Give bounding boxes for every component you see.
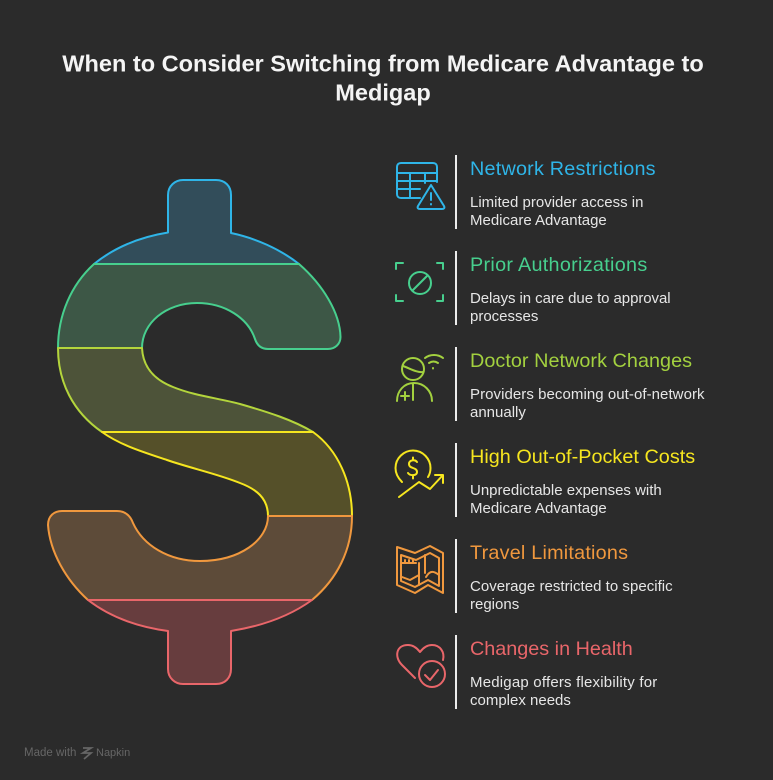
item: travel limitations: [397, 539, 673, 613]
heading: Travel Limitations: [470, 542, 628, 564]
dollar band: changes in health: [88, 600, 312, 684]
footer: made with Napkin: [24, 747, 130, 759]
icon: blocked symbol in focus frame: [396, 263, 443, 301]
dollar band: prior authorizations: [58, 264, 340, 349]
description: Delays in care due to approval: [470, 290, 671, 307]
description: Medicare Advantage: [470, 212, 607, 229]
divider: [455, 539, 457, 613]
divider: [455, 443, 457, 517]
description: Limited provider access in: [470, 194, 643, 211]
icon: table with warning triangle: [397, 163, 444, 209]
title: When to Consider Switching from Medicare Advantage to: [62, 50, 704, 76]
dollar sign chart: [48, 180, 352, 684]
item: changes in health: [397, 635, 657, 709]
divider: [455, 155, 457, 229]
dollar band: doctor network changes: [58, 348, 313, 432]
description: Unpredictable expenses with: [470, 482, 662, 499]
description: Medicare Advantage: [470, 500, 607, 517]
dollar band: high out-of-pocket costs: [102, 432, 352, 516]
icon: dollar coin with rising arrow: [396, 450, 443, 497]
icon: doctor with wifi signal: [397, 355, 443, 401]
footer: made with Napkin: Made with: [24, 747, 76, 759]
divider: [455, 347, 457, 421]
footer: made with Napkin: Napkin: [96, 747, 130, 759]
icon: folded map: [397, 546, 443, 593]
description: complex needs: [470, 692, 571, 709]
description: Coverage restricted to specific: [470, 578, 673, 595]
heading: High Out-of-Pocket Costs: [470, 446, 695, 468]
dollar band: travel limitations: [48, 511, 352, 600]
title: Medigap: [335, 80, 431, 106]
item: prior authorizations: [396, 251, 671, 325]
description: Medigap offers flexibility for: [470, 674, 657, 691]
dollar band: network restrictions: [94, 180, 299, 264]
description: annually: [470, 404, 526, 421]
item: network restrictions: [397, 155, 656, 229]
item: doctor network changes: [397, 347, 705, 421]
description: processes: [470, 308, 538, 325]
icon: heart with check mark: [397, 645, 445, 687]
description: Providers becoming out-of-network: [470, 386, 705, 403]
heading: Prior Authorizations: [470, 254, 648, 276]
heading: Changes in Health: [470, 638, 633, 660]
description: regions: [470, 596, 519, 613]
title: [62, 50, 704, 106]
divider: [455, 635, 457, 709]
item: high out-of-pocket costs: [396, 443, 695, 517]
heading: Doctor Network Changes: [470, 350, 692, 372]
heading: Network Restrictions: [470, 158, 656, 180]
divider: [455, 251, 457, 325]
